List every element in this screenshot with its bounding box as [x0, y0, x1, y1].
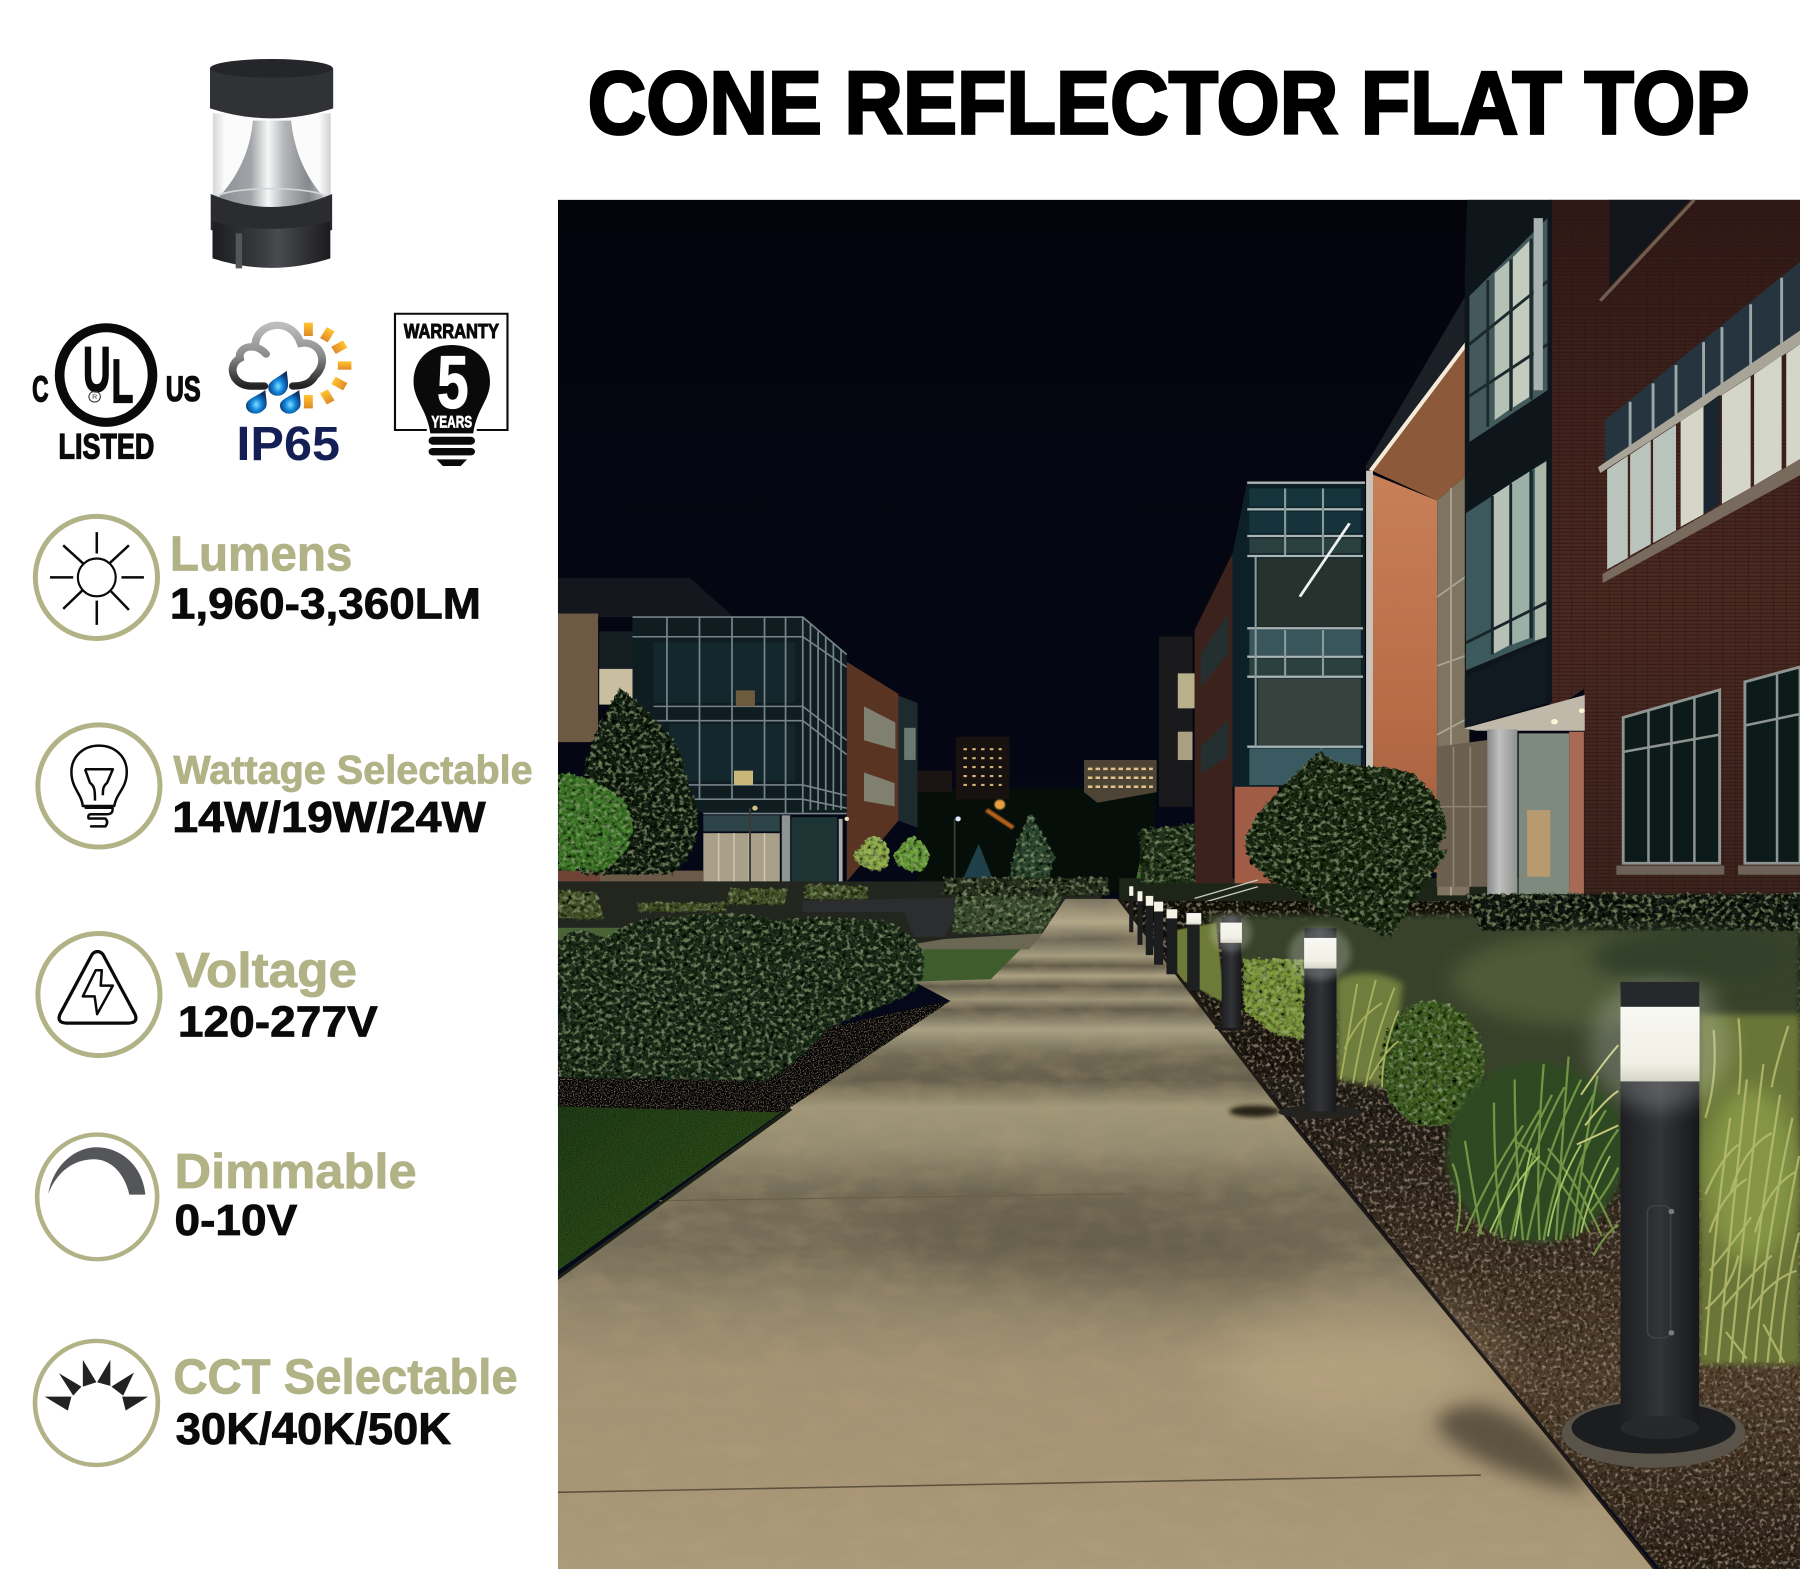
right distant buildings and glass block	[1159, 482, 1365, 883]
icon: lightning triangle in circle	[38, 933, 160, 1056]
mulch bed	[1119, 901, 1800, 1569]
icon: UL listed mark: C	[32, 369, 49, 409]
spec: dimmable: Dimmable	[174, 1144, 417, 1199]
spec: voltage	[38, 933, 378, 1056]
icon: UL listed mark	[32, 328, 201, 466]
spec: voltage: 120-277V	[178, 999, 378, 1047]
spec: lumens: 1,960-3,360LM	[170, 581, 481, 629]
walkway lighting and shadows	[558, 899, 1657, 1569]
icon: dimmer arc in circle	[37, 1135, 157, 1259]
icon: UL listed mark: L	[111, 347, 134, 416]
second bollard	[1278, 926, 1361, 1119]
third bollard	[1210, 913, 1252, 1031]
panel: specifications	[35, 516, 533, 1465]
far bollards	[1129, 886, 1177, 974]
icon: IP65 weather rating	[233, 323, 351, 471]
product image: bollard head	[210, 59, 333, 268]
glass stair tower	[1465, 200, 1552, 728]
icon: IP65 weather rating: IP65	[236, 417, 340, 471]
lower windows	[1623, 690, 1720, 863]
concrete plaza and road edge	[916, 933, 1042, 954]
foreground bollard	[1562, 980, 1746, 1468]
spec: CCT	[35, 1341, 518, 1465]
spec: lumens	[35, 516, 481, 639]
fourth bollard	[1186, 912, 1201, 990]
left campus buildings and background	[558, 578, 1157, 981]
icon: UL listed mark: US	[166, 369, 201, 409]
spec: wattage: Wattage Selectable	[173, 747, 533, 792]
row of bollard lights	[1129, 886, 1746, 1468]
spec: wattage: 14W/19W/24W	[172, 794, 486, 842]
icon: sun in circle	[35, 516, 157, 639]
brick wing	[1550, 200, 1800, 907]
courtyard tree	[1140, 750, 1446, 940]
panel: product and certifications	[32, 59, 507, 471]
orange clad entrance wing	[1365, 289, 1469, 895]
icon: 5 year warranty bulb: 5	[437, 342, 469, 424]
icon: light bulb in circle	[38, 725, 160, 847]
spec: wattage	[38, 725, 533, 847]
spec: CCT: 30K/40K/50K	[176, 1404, 451, 1454]
upper window band	[1605, 262, 1800, 468]
icon: UL listed mark: U	[83, 335, 111, 406]
panel: night pathway photo	[558, 200, 1800, 1569]
icon: UL listed mark: R	[92, 394, 97, 401]
spec: dimmable: 0-10V	[174, 1197, 297, 1245]
icon: 5 year warranty bulb	[395, 314, 507, 466]
icon: UL listed mark: LISTED	[59, 427, 154, 466]
left trees	[558, 689, 1155, 881]
spec: CCT: CCT Selectable	[173, 1350, 518, 1405]
lawn patch and hedge	[558, 913, 1021, 1271]
building entrance canopy and glass lobby	[1437, 695, 1585, 897]
ornamental grasses, shrubs and meadow	[1175, 850, 1800, 1365]
icon: 5 year warranty bulb: YEARS	[431, 412, 472, 431]
concrete walkway	[558, 899, 1653, 1569]
icon: sunrise in circle	[35, 1341, 158, 1465]
icon: 5 year warranty bulb: WARRANTY	[404, 321, 499, 343]
top window	[1609, 200, 1690, 287]
spec: voltage: Voltage	[176, 943, 357, 998]
spec: lumens: Lumens	[170, 527, 352, 582]
spec: dimmable	[37, 1135, 417, 1259]
right ground base	[1119, 878, 1519, 901]
